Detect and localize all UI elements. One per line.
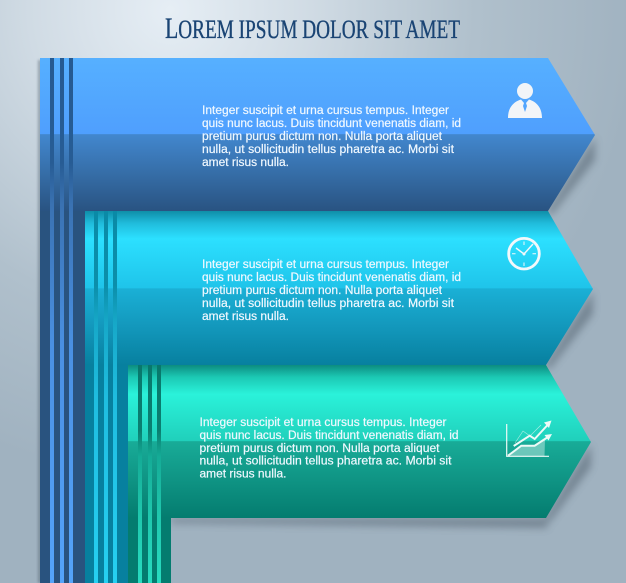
text 1 <box>202 105 461 169</box>
text 2 <box>202 259 461 323</box>
text 1: pretium purus dictum non. Nulla porta aliquet <box>202 131 443 143</box>
arrow body 2 <box>85 211 593 583</box>
panel 2: cyan arrow <box>85 211 593 583</box>
stripes 2 <box>94 211 117 583</box>
text 2: pretium purus dictum non. Nulla porta aliquet <box>202 285 443 297</box>
arrow shadows <box>171 137 595 528</box>
text 2: quis nunc lacus. Duis tincidunt venenatis diam, id <box>202 272 461 284</box>
stem base 1 <box>40 211 85 583</box>
stem base 2 <box>85 365 128 583</box>
text 2: amet risus nulla. <box>202 311 289 323</box>
text 2: Integer suscipit et urna cursus tempus. Integer <box>202 259 449 271</box>
panel 3: teal arrow <box>128 365 591 583</box>
text 3: pretium purus dictum non. Nulla porta aliquet <box>200 443 440 455</box>
stripes 3 <box>138 365 161 583</box>
text 3: Integer suscipit et urna cursus tempus. Integer <box>200 417 447 429</box>
left edge shadow <box>38 60 41 583</box>
text 2: nulla, ut sollicitudin tellus pharetra ac. Morbi sit <box>202 298 455 310</box>
text 1: quis nunc lacus. Duis tincidunt venenatis diam, id <box>202 118 461 130</box>
text 1: Integer suscipit et urna cursus tempus. Integer <box>202 105 449 117</box>
icon: person <box>508 83 542 118</box>
panel 1: blue arrow <box>40 58 595 583</box>
icon: growth chart <box>507 420 552 456</box>
text 3: amet risus nulla. <box>200 468 286 480</box>
text 1: amet risus nulla. <box>202 157 289 169</box>
arrow body 3 <box>128 365 591 583</box>
icon: clock <box>509 238 539 269</box>
text 3: nulla, ut sollicitudin tellus pharetra ac. Morbi sit <box>200 456 452 468</box>
title: LOREM IPSUM DOLOR SIT AMET <box>165 12 460 45</box>
stem base 3 <box>128 518 171 583</box>
text 3: quis nunc lacus. Duis tincidunt venenatis diam, id <box>200 430 458 442</box>
text 1: nulla, ut sollicitudin tellus pharetra ac. Morbi sit <box>202 144 455 156</box>
arrow body 1 <box>40 58 595 583</box>
text 3 <box>200 417 458 480</box>
stripes 1 <box>50 58 73 583</box>
